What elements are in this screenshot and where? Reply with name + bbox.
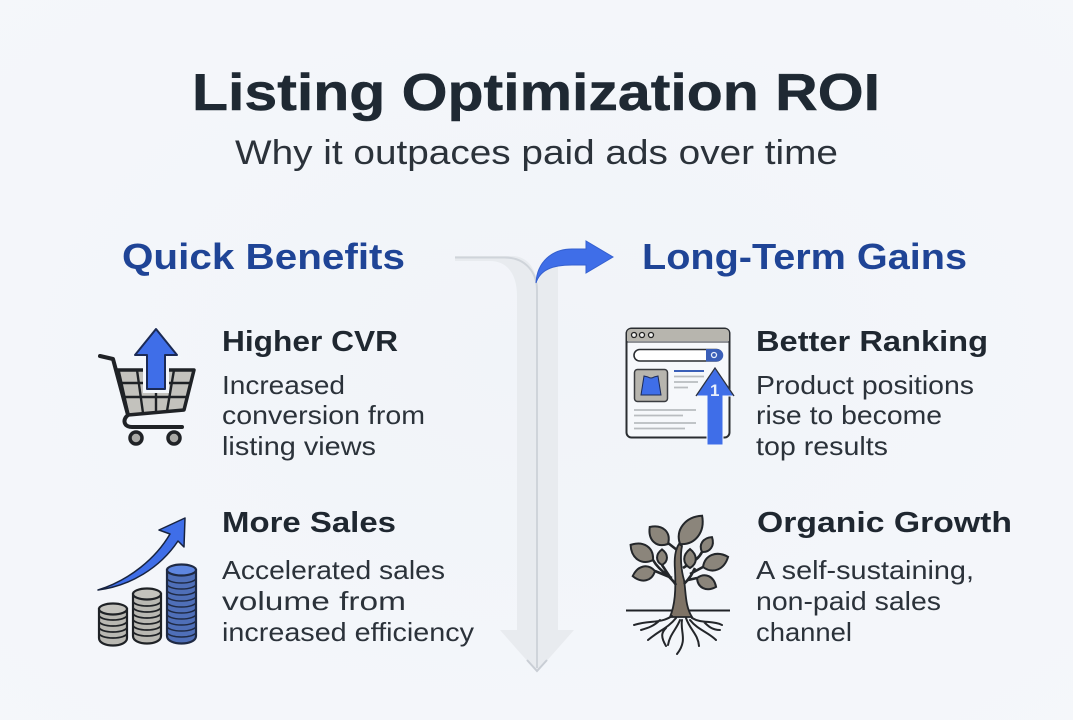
text: better ranking: Better Ranking	[756, 326, 988, 358]
text: better ranking: top results	[756, 431, 888, 461]
icon: browser window with rank arrow: 1	[710, 381, 719, 400]
text: organic growth	[756, 507, 1012, 647]
icon: tree with roots	[626, 510, 731, 654]
text: better ranking: rise to become	[756, 400, 942, 430]
text: higher cvr: Higher CVR	[222, 326, 398, 358]
text: organic growth: Organic Growth	[757, 507, 1012, 539]
text: more sales: Accelerated sales	[222, 555, 445, 585]
icon: shopping cart with up arrow	[100, 326, 194, 444]
text: more sales: increased efficiency	[222, 617, 474, 647]
text: organic growth: channel	[756, 617, 852, 647]
text: more sales	[222, 507, 474, 647]
text: organic growth: non-paid sales	[756, 586, 941, 616]
text: organic growth: A self-sustaining,	[756, 555, 974, 585]
heading: quick benefits: Quick Benefits	[122, 236, 405, 277]
text: higher cvr: listing views	[222, 431, 376, 461]
text: better ranking	[756, 326, 988, 461]
text: better ranking: Product positions	[756, 370, 974, 400]
text: higher cvr: conversion from	[222, 400, 425, 430]
central divider arrow	[455, 256, 574, 672]
icon: coin stacks with growth arrow	[98, 518, 196, 646]
text: higher cvr	[222, 326, 425, 461]
subtitle: Why it outpaces paid ads over time	[235, 134, 838, 172]
title: Listing Optimization ROI	[192, 64, 880, 122]
blue turn arrow	[536, 241, 613, 283]
text: higher cvr: Increased	[222, 370, 345, 400]
text: more sales: volume from	[222, 586, 406, 616]
heading: long-term gains: Long-Term Gains	[642, 236, 967, 277]
icon: browser window with rank arrow	[626, 328, 734, 445]
text: more sales: More Sales	[222, 507, 396, 539]
